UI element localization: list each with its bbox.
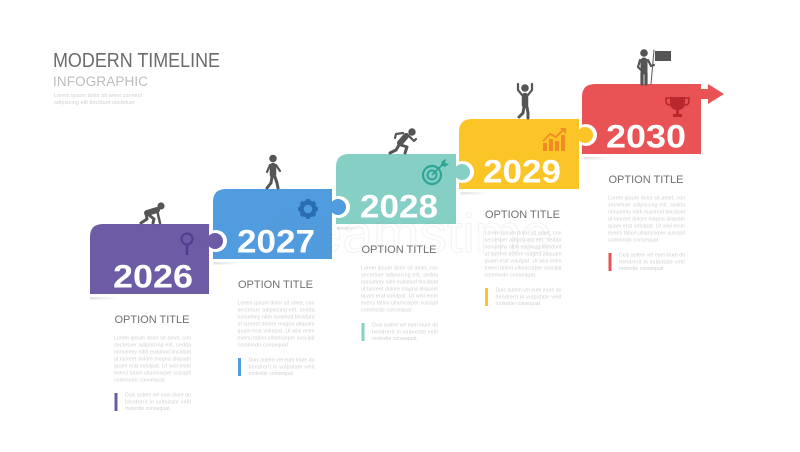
body text: commodo consequat. (114, 378, 166, 384)
panel: 2030 option text (584, 157, 686, 272)
icon: growth chart (543, 128, 566, 151)
panel: 2028 option text (337, 226, 460, 342)
year: 2029 (483, 154, 561, 190)
note text: Duis autem vel eum iriure do (496, 288, 562, 294)
connector tab (454, 164, 470, 180)
note text: molestie consequat. (619, 266, 665, 272)
panel: 2029 option text (460, 191, 584, 307)
note text (496, 288, 562, 307)
body text: nonummy nibh euismod tincidunt (114, 350, 192, 356)
note text: hendrerit in vulputate velit (496, 294, 562, 300)
body text: sectetuer adipiscing elit, sedda (114, 342, 191, 348)
note text: molestie consequat. (248, 371, 294, 377)
body text: quam erat volutpat. Ut wisi enim (114, 364, 191, 370)
body text (238, 300, 315, 348)
note text (372, 322, 439, 342)
year: 2028 (360, 188, 438, 224)
figure: man with flag (638, 49, 671, 84)
body text: quam erat volutpat. Ut wisi enim (484, 258, 562, 264)
option title: OPTION TITLE (362, 244, 436, 256)
icon: target (423, 159, 449, 184)
note text: Duis autem vel eum iriure do (125, 392, 191, 398)
panel: 2027 option text (214, 261, 336, 377)
arrow: red end arrow (700, 84, 724, 104)
note text: hendrerit in vulputate velit (248, 364, 315, 370)
year: 2030 (606, 118, 686, 154)
note text: Duis autem vel eum iriure do (619, 252, 685, 258)
note text: hendrerit in vulputate velit (619, 260, 686, 266)
body text: ut laoreet dolore magna aliquam (114, 356, 191, 362)
body text: ut laoreet dolore magna aliquam (238, 322, 314, 328)
body text: sectetuer adipiscing elit, sedda (484, 238, 562, 244)
body text: nonummy nibh euismod tincidunt (238, 314, 315, 320)
year: 2027 (237, 224, 315, 260)
body text (114, 336, 192, 384)
option title: OPTION TITLE (238, 279, 313, 291)
body text: quam erat volutpat. Ut wisi enim (238, 328, 314, 334)
accent bar (114, 393, 118, 411)
figure: crouching runner (141, 202, 165, 223)
figure: sprinting man (390, 128, 416, 153)
body text: quam erat volutpat. Ut wisi enim (608, 224, 685, 230)
body text: exerci tation ullamcorper suscipit (238, 336, 315, 342)
body text (608, 196, 686, 244)
card: 2027 (213, 189, 350, 260)
note text: molestie consequat. (125, 406, 171, 412)
body text (361, 266, 439, 314)
option title: OPTION TITLE (609, 174, 683, 186)
note text: Duis autem vel eum iriure do (248, 358, 315, 364)
subtitle: INFOGRAPHIC (53, 74, 148, 89)
note text (248, 358, 315, 377)
connector tab (330, 199, 346, 215)
text: dreamstime (262, 204, 552, 264)
note text: hendrerit in vulputate velit (125, 400, 192, 406)
panel: 2026 option text (90, 296, 213, 412)
intro text: Lorem ipsum dolor sit amet connect (54, 93, 142, 99)
body text: exerci tation ullamcorper suscipit (484, 266, 562, 272)
accent bar (238, 358, 241, 376)
body text: exerci tation ullamcorper suscipit (114, 370, 192, 376)
option title: OPTION TITLE (115, 314, 189, 326)
note text (125, 392, 192, 412)
connector tab (207, 233, 223, 249)
body text: commodo consequat. (238, 342, 290, 348)
icon: trophy (666, 97, 689, 117)
card: 2026 (90, 224, 227, 294)
note text: molestie consequat. (496, 301, 542, 307)
body text (484, 230, 562, 278)
body text: Lorem ipsum dolor sit amet, con (608, 196, 685, 202)
note text (619, 252, 686, 272)
accent bar (362, 323, 364, 341)
body text: sectetuer adipiscing elit, sedda (608, 202, 685, 208)
title block (53, 50, 220, 106)
option title: OPTION TITLE (485, 209, 560, 221)
card: 2028 (336, 154, 474, 224)
body text: ut laoreet dolore magna aliquam (608, 216, 685, 222)
body text: commodo consequat. (608, 238, 660, 244)
body text: exerci tation ullamcorper suscipit (361, 300, 439, 306)
year: 2026 (113, 258, 193, 294)
accent bar (485, 288, 488, 306)
figure: walking man (267, 155, 280, 188)
body text: nonummy nibh euismod tincidunt (361, 280, 439, 286)
body text: exerci tation ullamcorper suscipit (608, 230, 686, 236)
figure: man with arms raised (518, 84, 532, 118)
icon: gear (298, 199, 318, 219)
body text: sectetuer adipiscing elit, sedda (361, 272, 438, 278)
body text: Lorem ipsum dolor sit amet, con (114, 336, 191, 342)
note text: Duis autem vel eum iriure do (372, 322, 438, 328)
body text: nonummy nibh euismod tincidunt (608, 210, 686, 216)
intro text: adipiscing elit tincidunt sectetuer (54, 100, 135, 106)
note text: hendrerit in vulputate velit (372, 330, 439, 336)
body text: ut laoreet dolore magna aliquam (484, 252, 562, 258)
card: 2030 (582, 84, 701, 154)
body text: ut laoreet dolore magna aliquam (361, 286, 438, 292)
body text: commodo consequat. (484, 272, 536, 278)
body text: Lorem ipsum dolor sit amet, con (484, 230, 562, 236)
body text: sectetuer adipiscing elit, sedda (238, 308, 315, 314)
icon: magnifier (182, 234, 192, 255)
body text: nonummy nibh euismod tincidunt (484, 244, 562, 250)
note text: molestie consequat. (372, 336, 418, 342)
intro text (54, 93, 142, 106)
accent bar (608, 253, 612, 271)
body text: commodo consequat. (361, 308, 413, 314)
title: MODERN TIMELINE (53, 50, 220, 72)
card: 2029 (459, 119, 597, 190)
body text: Lorem ipsum dolor sit amet, con (361, 266, 438, 272)
connector tab (577, 127, 593, 143)
body text: Lorem ipsum dolor sit amet, con (238, 300, 315, 306)
body text: quam erat volutpat. Ut wisi enim (361, 294, 438, 300)
